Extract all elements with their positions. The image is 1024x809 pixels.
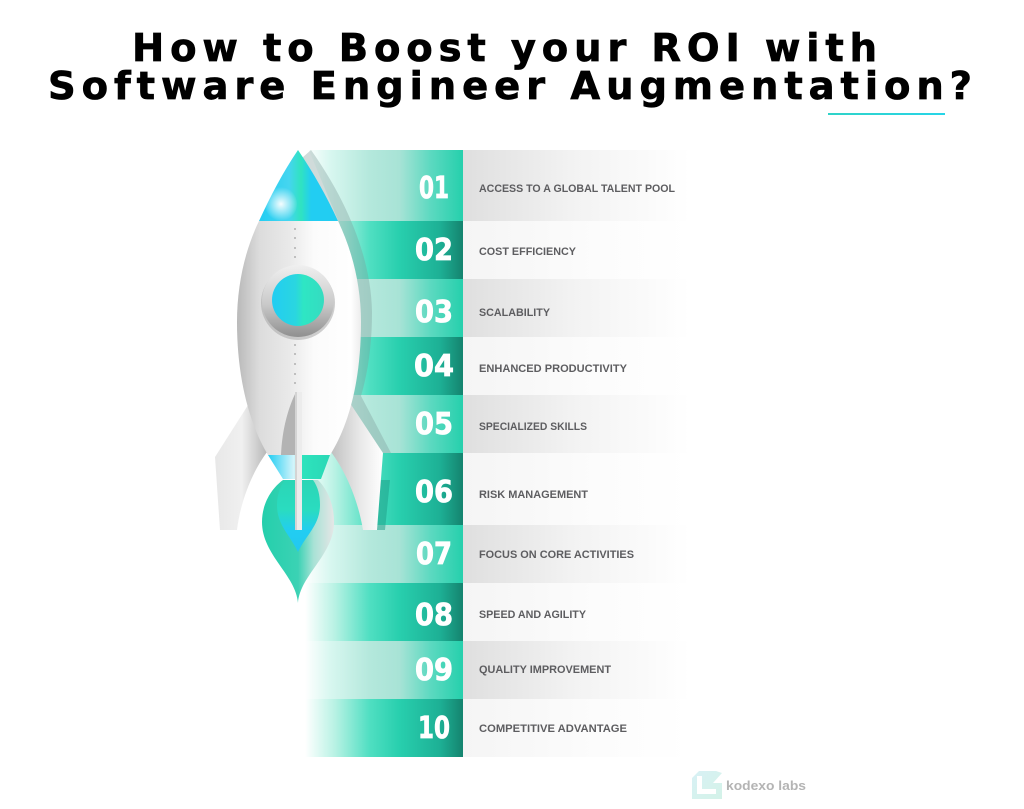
row 09 [305, 641, 693, 699]
central strut [295, 392, 302, 530]
row 06 [305, 453, 693, 525]
flame outer [262, 480, 334, 603]
row 07 [305, 525, 693, 583]
logo wordmark: kodexo labs [726, 778, 806, 793]
right fin [331, 400, 383, 530]
row 03: 03 [415, 295, 453, 330]
flame inner [277, 480, 320, 552]
row 09: QUALITY IMPROVEMENT [479, 664, 611, 676]
row 03: SCALABILITY [479, 307, 551, 319]
white backing between the tip and the shadow [296, 148, 340, 225]
row 07: FOCUS ON CORE ACTIVITIES [479, 549, 635, 561]
row 02: 02 [415, 233, 453, 268]
body inner shade [281, 392, 296, 455]
row 08 [305, 583, 693, 641]
title underline accent [828, 113, 945, 115]
nose highlight [265, 187, 297, 221]
left fin [215, 402, 267, 530]
porthole [261, 265, 335, 340]
row 06: 06 [415, 475, 453, 510]
row 10: 10 [418, 711, 450, 746]
row 05 [305, 395, 693, 453]
row 01 [305, 150, 693, 221]
row 03 [305, 279, 693, 337]
row 04: 04 [414, 349, 454, 384]
logo mark [692, 771, 722, 799]
row 04 [305, 337, 693, 395]
rocket body [237, 221, 361, 455]
row 02 [305, 221, 693, 279]
row 08: SPEED AND AGILITY [479, 609, 587, 621]
right fin shadow [372, 480, 390, 530]
list of ten benefits [305, 150, 693, 757]
row 07: 07 [416, 537, 452, 572]
title: How to Boost your ROI with [132, 26, 877, 71]
row 05: SPECIALIZED SKILLS [479, 421, 587, 433]
nose cone [259, 150, 338, 221]
rocket illustration [215, 148, 391, 603]
rivets upper [294, 228, 296, 258]
row 10: COMPETITIVE ADVANTAGE [479, 723, 628, 735]
row 08: 08 [415, 598, 453, 633]
row 04: ENHANCED PRODUCTIVITY [479, 363, 628, 375]
row 01: ACCESS TO A GLOBAL TALENT POOL [479, 183, 675, 195]
rivets lower [294, 344, 296, 384]
nozzle [268, 455, 330, 479]
row 10 [305, 699, 693, 757]
row 01: 01 [419, 171, 449, 206]
logo [692, 771, 806, 799]
rocket cast shadow [302, 150, 391, 453]
row 06: RISK MANAGEMENT [479, 489, 588, 501]
row 02: COST EFFICIENCY [479, 246, 577, 258]
row 09: 09 [415, 653, 453, 688]
title [48, 26, 972, 109]
title: Software Engineer Augmentation? [48, 64, 972, 109]
row 05: 05 [415, 407, 453, 442]
